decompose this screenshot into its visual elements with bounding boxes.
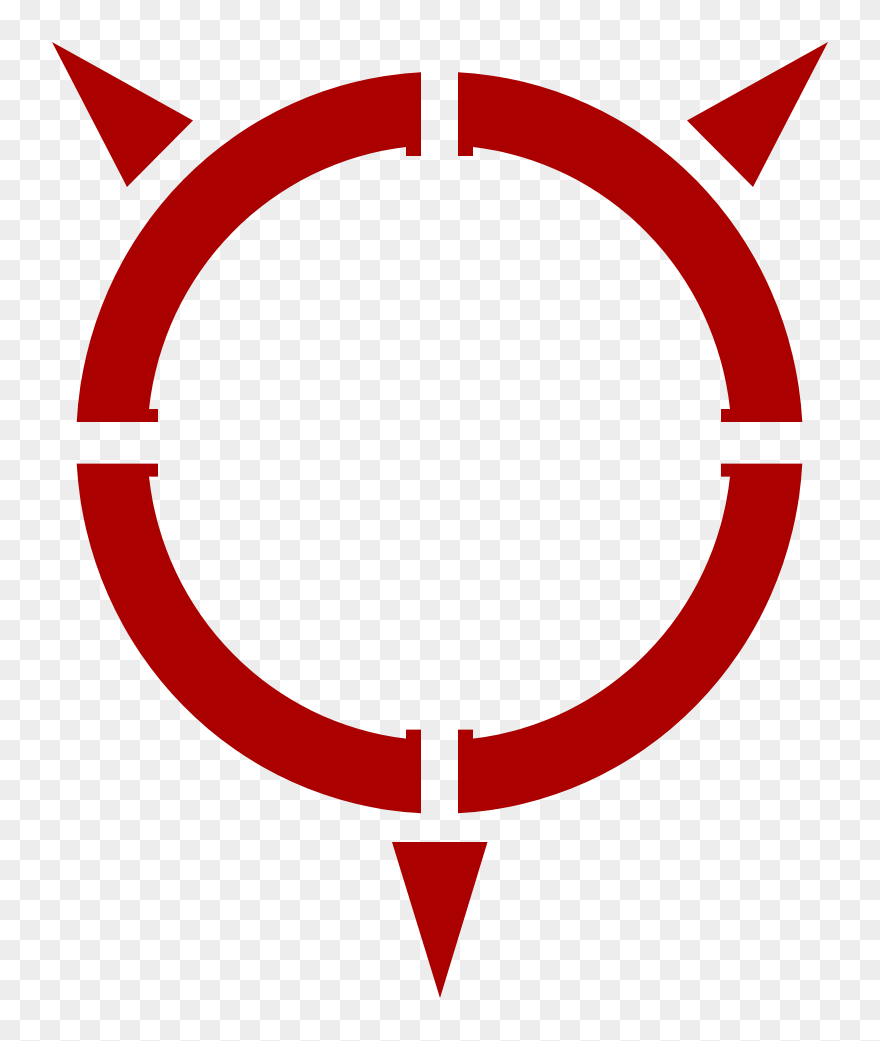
ring: bottom-right segment bbox=[458, 464, 802, 813]
ring: top-right segment bbox=[458, 72, 802, 422]
icon: bottom spike bbox=[392, 842, 488, 998]
ring: bottom-left segment bbox=[77, 464, 421, 813]
icon: top-right horn bbox=[687, 42, 828, 187]
ring: top-left segment bbox=[77, 72, 421, 422]
icon: top-left horn bbox=[52, 42, 193, 187]
